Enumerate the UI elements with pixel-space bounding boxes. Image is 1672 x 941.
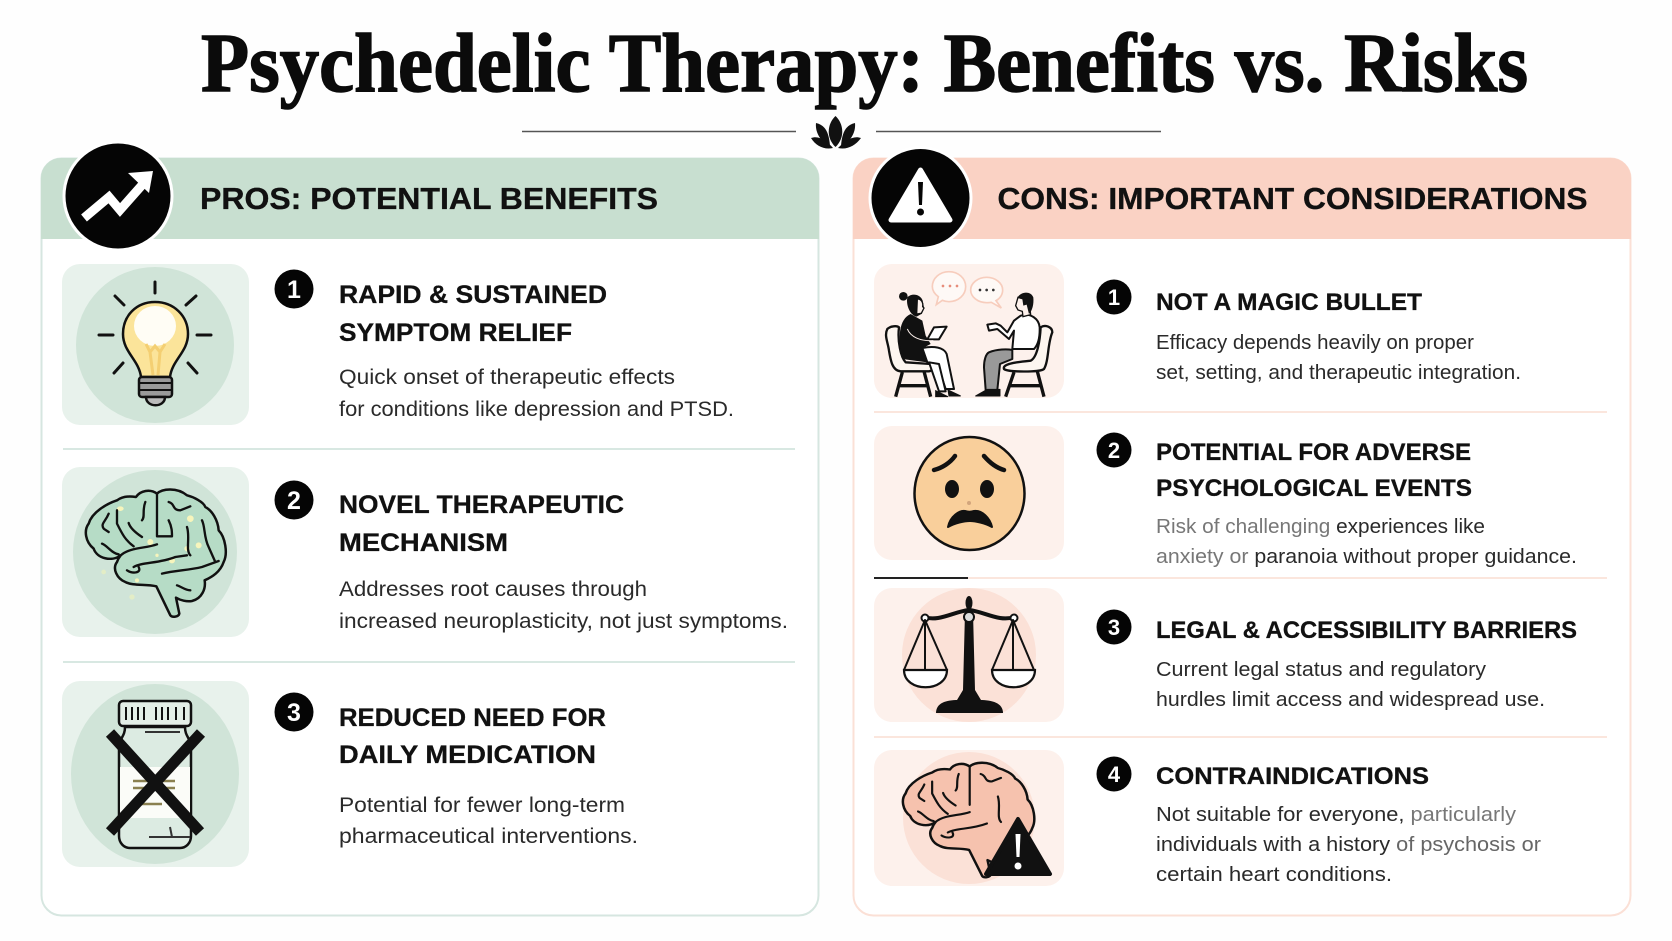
benefit 3 heading: DAILY MEDICATION xyxy=(339,741,596,769)
benefit 2 description xyxy=(339,577,788,633)
benefit 3 heading: REDUCED NEED FOR xyxy=(339,704,606,732)
icon: brain with warning xyxy=(874,750,1064,886)
speech bubbles xyxy=(932,272,1003,308)
icon: crossed-out pill bottle xyxy=(62,681,249,867)
number badge 1 xyxy=(274,270,314,308)
cons heading: CONS: IMPORTANT CONSIDERATIONS xyxy=(998,181,1588,216)
icon: green brain xyxy=(62,467,249,637)
consideration 1 description: set, setting, and therapeutic integration. xyxy=(1156,361,1521,384)
panel: pros xyxy=(41,140,819,916)
number badge 2 xyxy=(274,480,314,520)
number badge 1 xyxy=(1096,280,1132,314)
consideration 3 description: hurdles limit access and widespread use. xyxy=(1156,688,1545,711)
icon: lotus xyxy=(811,116,861,149)
pros heading: PROS: POTENTIAL BENEFITS xyxy=(200,181,658,216)
icon: worried face xyxy=(874,426,1064,560)
number badge 3 xyxy=(274,692,314,732)
benefit 3 description: pharmaceutical interventions. xyxy=(339,824,638,848)
number badge 4 xyxy=(1096,756,1132,792)
consideration 4 description xyxy=(1156,803,1541,886)
consideration 3 description xyxy=(1156,658,1545,711)
consideration 4 description: certain heart conditions. xyxy=(1156,863,1392,886)
consideration 2 heading: POTENTIAL FOR ADVERSE xyxy=(1156,439,1471,466)
number badge 1: 1 xyxy=(1108,285,1120,310)
benefit 1 heading xyxy=(339,281,607,347)
consideration 1 heading: NOT A MAGIC BULLET xyxy=(1156,289,1422,316)
benefit 2 description: increased neuroplasticity, not just symptoms. xyxy=(339,609,788,633)
consideration 1 description: Efficacy depends heavily on proper xyxy=(1156,331,1474,354)
number badge 2 xyxy=(1096,432,1132,468)
number badge 2: 2 xyxy=(1108,438,1120,463)
woman xyxy=(899,292,908,301)
consideration 2 description: Risk of challenging experiences like xyxy=(1156,515,1485,538)
consideration 4 heading: CONTRAINDICATIONS xyxy=(1156,763,1429,790)
title: Psychedelic Therapy: Benefits vs. Risks xyxy=(201,17,1528,110)
benefit 3 description: Potential for fewer long-term xyxy=(339,793,625,817)
cons header band xyxy=(853,158,1631,239)
number badge 3: 3 xyxy=(287,699,301,727)
number badge 2: 2 xyxy=(287,487,301,515)
consideration 4 description: individuals with a history of psychosis or xyxy=(1156,833,1541,856)
chairs xyxy=(886,326,1052,371)
benefit 3 xyxy=(62,681,638,867)
benefit 1 description: for conditions like depression and PTSD. xyxy=(339,397,734,421)
consideration 3 description: Current legal status and regulatory xyxy=(1156,658,1487,681)
number badge 3 xyxy=(1096,610,1132,644)
benefit 1 description: Quick onset of therapeutic effects xyxy=(339,365,675,389)
consideration 2 xyxy=(874,426,1577,568)
icon: scales of justice xyxy=(874,588,1064,722)
icon: therapy conversation xyxy=(874,264,1064,398)
benefit 3 description xyxy=(339,793,638,848)
panel: cons xyxy=(853,146,1631,916)
benefit 1 xyxy=(62,264,734,425)
benefit 1 description xyxy=(339,365,734,421)
pros header band xyxy=(41,158,819,239)
icon: warning triangle xyxy=(868,146,972,250)
consideration 1 description xyxy=(1156,331,1521,384)
benefit 2 heading: NOVEL THERAPEUTIC xyxy=(339,491,624,519)
benefit 1 heading: RAPID & SUSTAINED xyxy=(339,281,607,309)
benefit 2 heading xyxy=(339,491,624,557)
consideration 3 heading: LEGAL & ACCESSIBILITY BARRIERS xyxy=(1156,617,1577,644)
consideration 4 xyxy=(874,750,1541,886)
consideration 1 xyxy=(874,264,1521,398)
consideration 4 description: Not suitable for everyone, particularly xyxy=(1156,803,1517,826)
consideration 2 description: anxiety or paranoia without proper guidance. xyxy=(1156,545,1577,568)
consideration 2 description xyxy=(1156,515,1577,568)
consideration 2 heading xyxy=(1156,439,1472,502)
man xyxy=(984,349,1012,390)
number badge 3: 3 xyxy=(1108,615,1120,640)
number badge 4: 4 xyxy=(1108,762,1121,787)
benefit 3 heading xyxy=(339,704,606,769)
benefit 2 xyxy=(62,467,788,637)
benefit 1 heading: SYMPTOM RELIEF xyxy=(339,319,572,347)
icon: trending up arrow xyxy=(62,140,174,252)
consideration 2 heading: PSYCHOLOGICAL EVENTS xyxy=(1156,475,1472,502)
benefit 2 description: Addresses root causes through xyxy=(339,577,647,601)
number badge 1: 1 xyxy=(287,276,301,304)
benefit 2 heading: MECHANISM xyxy=(339,529,508,557)
icon: light bulb xyxy=(62,264,249,425)
consideration 3 xyxy=(874,588,1577,722)
